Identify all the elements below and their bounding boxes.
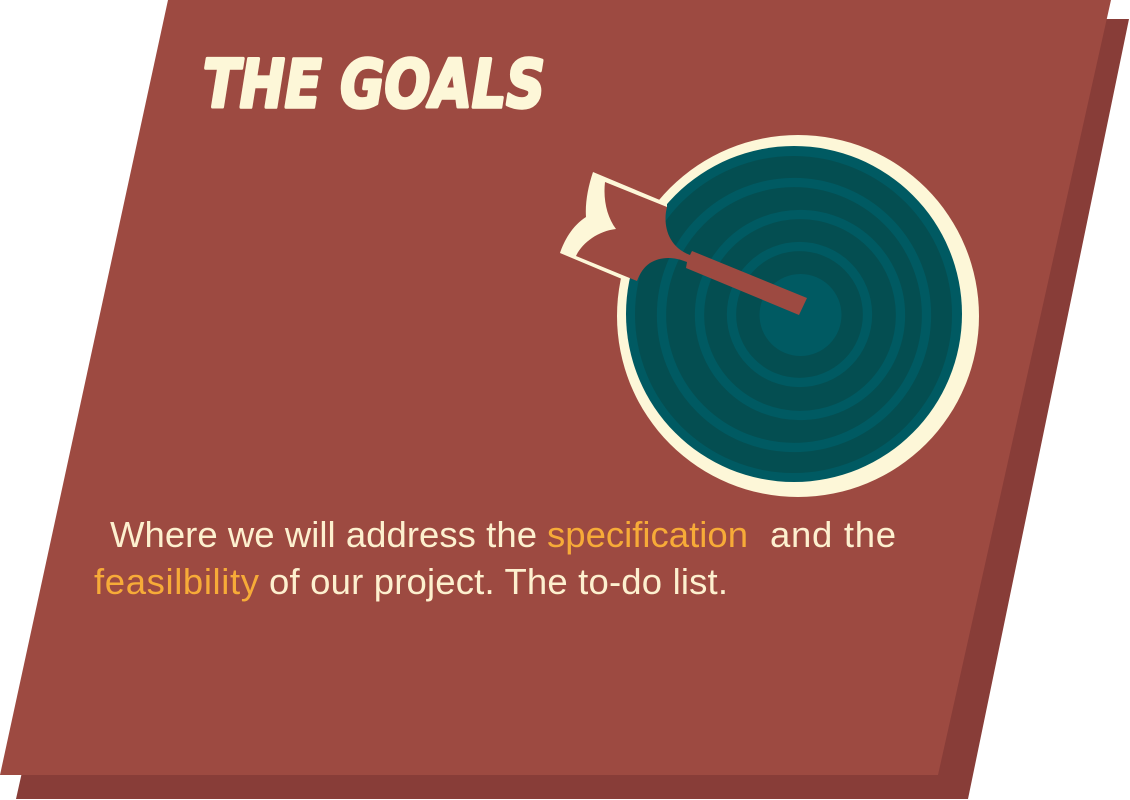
- target teal disc: [626, 146, 962, 482]
- highlight: feasilbility: feasilbility: [94, 561, 260, 602]
- target bullseye: [760, 274, 842, 356]
- target rings: [662, 182, 926, 448]
- heading: THE GOALS: [203, 46, 545, 123]
- target dark disc: [635, 156, 952, 473]
- line 1 end: and the: [770, 514, 896, 555]
- target outer ring: [617, 135, 979, 497]
- line 1: Where we will address the: [110, 514, 537, 555]
- icon: target with arrow: [560, 135, 979, 497]
- highlight: specification: specification: [547, 514, 748, 555]
- line 2: of our project. The to-do list.: [269, 561, 728, 602]
- arrow: [576, 182, 807, 315]
- arrow fletching outline: [560, 172, 667, 279]
- body text: [94, 514, 896, 602]
